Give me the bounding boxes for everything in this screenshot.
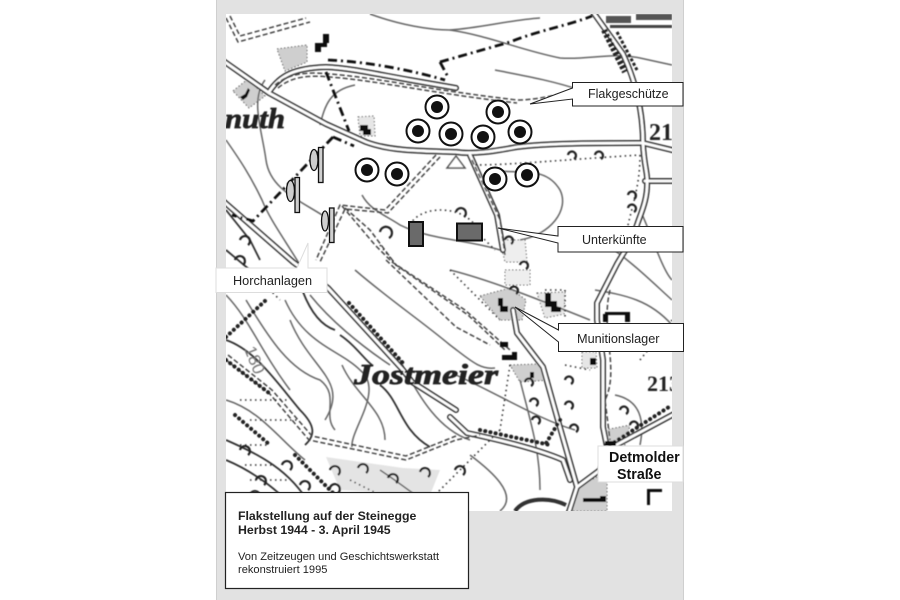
- shaded farm plots: [233, 45, 630, 511]
- main double roads: [222, 12, 676, 515]
- contour label 180: 180: [240, 343, 269, 377]
- listening posts: [286, 148, 334, 242]
- callout: Flakgeschütze: [530, 82, 683, 106]
- callout: Flakgeschütze: Flakgeschütze: [588, 87, 669, 101]
- label: Detmolder Straße: Straße: [617, 467, 662, 483]
- source note: rekonstruiert 1995: [238, 564, 327, 576]
- title heading: Flakstellung auf der Steinegge: [238, 509, 417, 523]
- callout: Horchanlagen: Horchanlagen: [233, 274, 312, 288]
- background panel: [216, 0, 684, 600]
- title heading: [238, 509, 417, 537]
- callout: Munitionslager: Munitionslager: [577, 332, 660, 346]
- callout: Unterkünfte: [498, 226, 683, 252]
- accommodation huts: [409, 222, 482, 246]
- bead lines: [226, 300, 672, 510]
- source note: [238, 551, 439, 576]
- callout: Munitionslager: [515, 307, 684, 352]
- dashed tracks: [226, 16, 611, 460]
- label: Detmolder Straße: Detmolder: [609, 450, 680, 466]
- dark contour lines: [226, 210, 566, 511]
- buildings: [240, 14, 672, 505]
- boundary dash-dot lines: [232, 16, 592, 221]
- title box: [226, 492, 468, 588]
- place name: Jostmeier: Jostmeier: [353, 360, 499, 391]
- place name: nuth: nuth: [225, 104, 285, 135]
- flak gun positions: [356, 96, 538, 190]
- title heading: Herbst 1944 - 3. April 1945: [238, 523, 391, 537]
- triangle survey mark: [447, 156, 465, 168]
- map: [222, 12, 680, 515]
- callout: Unterkünfte: Unterkünfte: [582, 233, 647, 247]
- contour lines: [226, 14, 672, 511]
- hachure marks: [235, 152, 638, 510]
- dotted field borders: [240, 155, 672, 500]
- spot height 21: 21: [649, 120, 673, 146]
- callout: Horchanlagen: [216, 243, 327, 292]
- source note: Von Zeitzeugen und Geschichtswerkstatt: [238, 551, 439, 563]
- spot height 213: 213: [647, 371, 680, 396]
- wooded strip: [604, 30, 625, 72]
- label: Detmolder Straße: [598, 446, 683, 483]
